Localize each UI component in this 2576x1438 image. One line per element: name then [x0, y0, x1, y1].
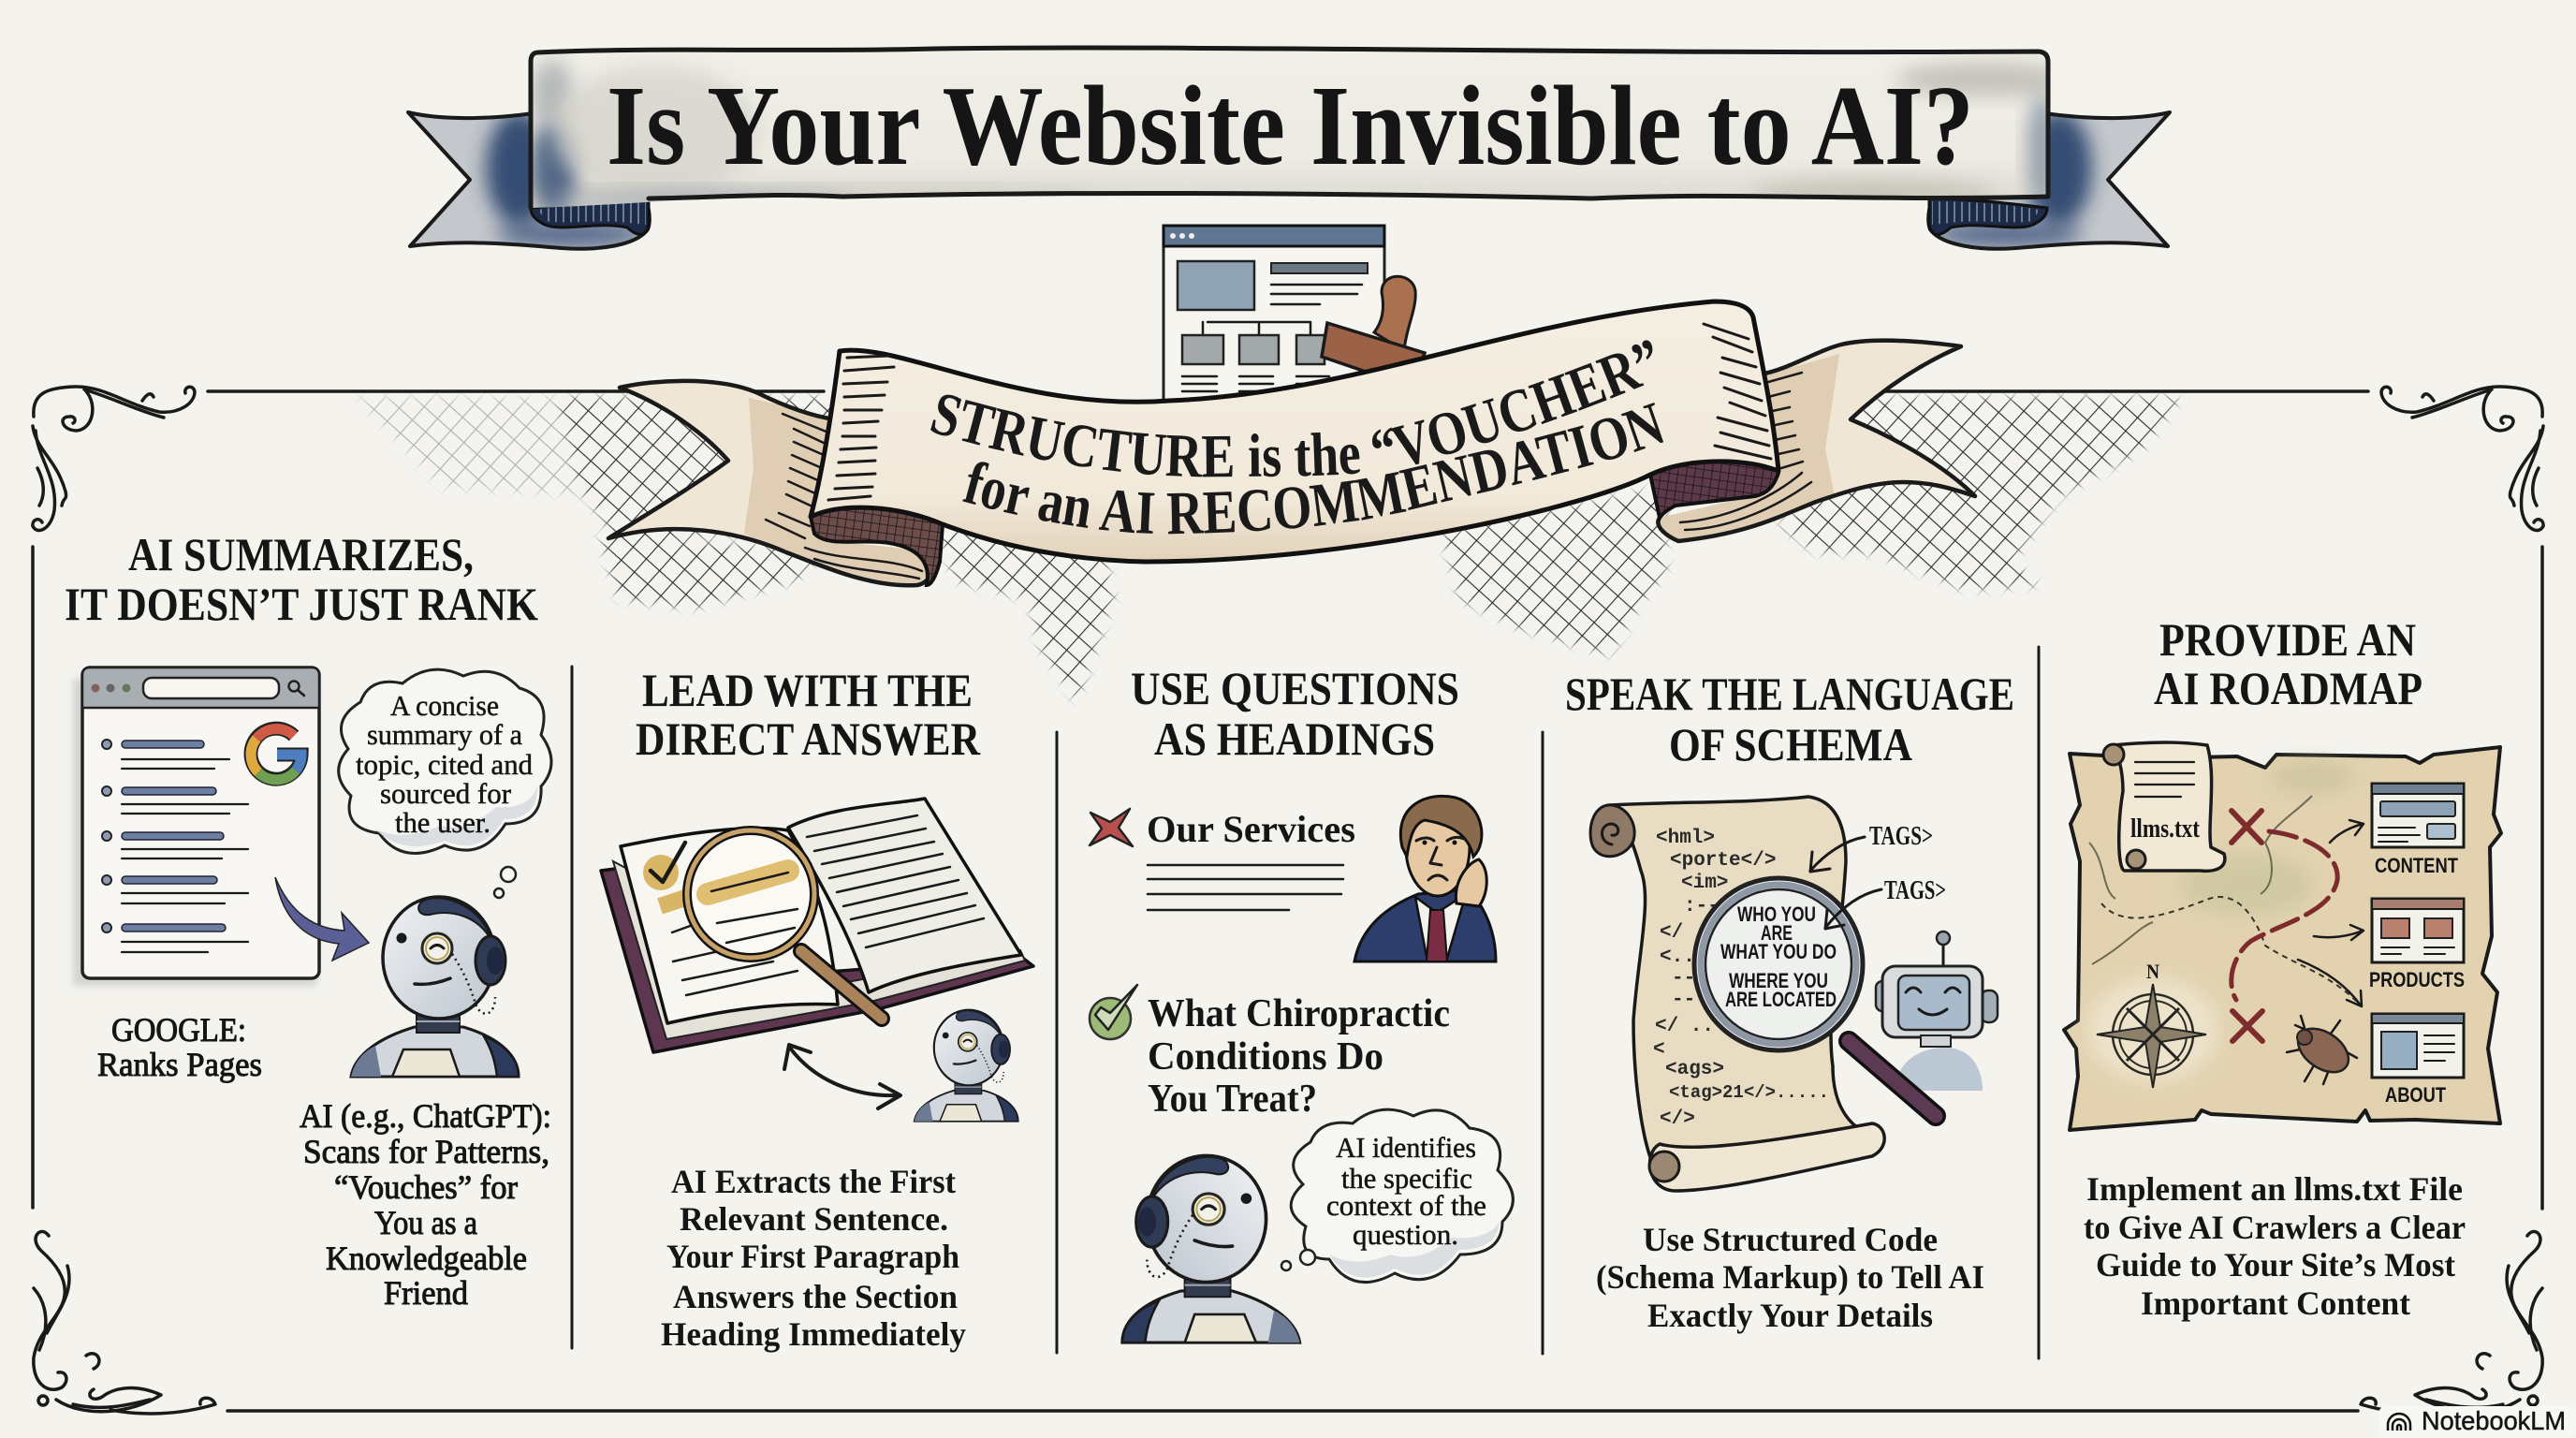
- good heading example: Conditions Do: [1148, 1035, 1383, 1078]
- NotebookLM watermark: [2378, 1406, 2576, 1438]
- ribbon text: STRUCTURE is the “VOUCHER”: [930, 340, 1653, 477]
- thought bubble: A concise: [390, 689, 499, 722]
- code lines: <..: [1660, 946, 1695, 968]
- body text: Implement an llms.txt File: [2086, 1170, 2463, 1208]
- heading: PROVIDE AN: [2159, 613, 2416, 666]
- tag labels and arrows: TAGS>: [1884, 876, 1946, 905]
- heading: [636, 664, 981, 765]
- icon: google G logo: [251, 728, 301, 780]
- caption: AI: AI (e.g., ChatGPT):: [300, 1097, 551, 1135]
- body text: (Schema Markup) to Tell AI: [1596, 1258, 1984, 1296]
- thought bubble: sourced for: [380, 777, 512, 810]
- body text: AI Extracts the First: [671, 1163, 956, 1200]
- banner left tail: [408, 110, 650, 249]
- good heading example: You Treat?: [1148, 1078, 1317, 1121]
- thought bubble: [1281, 1109, 1513, 1283]
- code lines: --: [1672, 968, 1695, 990]
- icon: llms.txt scroll: llms.txt: [2130, 814, 2201, 844]
- icon: compass rose: [2097, 960, 2206, 1088]
- icon: small robot: [915, 1010, 1018, 1122]
- code lines: <: [1653, 1039, 1665, 1061]
- icon: code scroll: [1590, 797, 1884, 1191]
- caption: google: GOOGLE:: [111, 1011, 246, 1049]
- site page: products: [2369, 899, 2465, 991]
- heading: [65, 528, 538, 630]
- banner right tail: [1928, 110, 2170, 249]
- caption: AI: Scans for Patterns,: [303, 1133, 549, 1170]
- icon: website page with stamp: [1164, 226, 1425, 404]
- icon: magnifying glass: WHAT YOU DO: [1720, 940, 1837, 963]
- code lines: :--: [1684, 896, 1720, 917]
- heading: IT DOESN’T JUST RANK: [65, 578, 538, 630]
- site page: content: [2372, 784, 2464, 877]
- body text: to Give AI Crawlers a Clear: [2084, 1209, 2466, 1246]
- icon: llms.txt scroll: [2103, 742, 2225, 871]
- site page: about: ABOUT: [2385, 1083, 2446, 1107]
- code lines: [1653, 828, 1829, 1130]
- good heading example: [1148, 992, 1450, 1121]
- caption: AI: “Vouches” for: [334, 1168, 518, 1206]
- body text: Answers the Section: [673, 1278, 958, 1315]
- thought bubble: [339, 669, 551, 898]
- NotebookLM watermark: NotebookLM: [2422, 1406, 2566, 1435]
- website page: [1164, 226, 1384, 404]
- ribbon right fold: [1650, 458, 1778, 518]
- arrow: book and robot exchange: [784, 1045, 900, 1108]
- heading: [2154, 613, 2422, 714]
- icon: green check: [1090, 985, 1137, 1039]
- body text: Your First Paragraph: [666, 1238, 959, 1275]
- icon: google browser window: [73, 668, 319, 986]
- body text: Heading Immediately: [661, 1315, 966, 1353]
- ribbon: structure is the voucher: [607, 300, 1977, 588]
- rubber stamp: [1322, 276, 1425, 388]
- title text: Is Your Website Invisible to AI?: [607, 63, 1974, 189]
- heading: SPEAK THE LANGUAGE: [1565, 668, 2014, 720]
- icon: smiling robot: [1876, 932, 1998, 1091]
- ribbon left tail: [608, 381, 931, 585]
- code lines: </: [1660, 922, 1683, 944]
- title banner: [408, 48, 2170, 249]
- heading: [1131, 662, 1459, 765]
- icon: bored man: [1354, 796, 1496, 961]
- icon: NotebookLM: [2388, 1414, 2410, 1431]
- heading: USE QUESTIONS: [1131, 662, 1459, 714]
- tag labels and arrows: [1810, 822, 1946, 929]
- body text: [1596, 1221, 1984, 1334]
- arrows to site pages: [2298, 820, 2364, 1006]
- body text: Use Structured Code: [1643, 1221, 1938, 1258]
- thought bubble: the specific: [1341, 1162, 1472, 1195]
- icon: compass rose: N: [2146, 960, 2159, 983]
- icon: beetle: [2287, 1016, 2357, 1084]
- body text: Guide to Your Site’s Most: [2096, 1246, 2455, 1284]
- icon: magnifying glass: WHO YOU: [1737, 902, 1816, 926]
- arrow: google to AI: [275, 877, 369, 961]
- code lines: <im>: [1681, 873, 1728, 894]
- bad heading example: [1147, 808, 1355, 910]
- thought bubble: AI identifies: [1336, 1131, 1476, 1164]
- code lines: <hml>: [1656, 828, 1715, 849]
- thought bubble: summary of a: [367, 718, 522, 751]
- banner main body: [531, 48, 2048, 208]
- panel: use questions as headings: [1090, 662, 1513, 1343]
- caption: AI: Knowledgeable: [326, 1240, 527, 1277]
- ribbon edge shading: [828, 324, 1771, 500]
- caption: AI: [300, 1097, 551, 1312]
- ribbon main body: [811, 301, 1778, 562]
- ribbon left fold: [811, 507, 943, 585]
- body text: [2084, 1170, 2466, 1322]
- bad heading example: Our Services: [1147, 808, 1355, 850]
- icon: red cross: [1090, 809, 1133, 846]
- icon: magnifying glass: [1694, 878, 1936, 1116]
- ornate frame: [33, 387, 2543, 1414]
- code lines: <tag>21</>.....: [1669, 1082, 1829, 1103]
- heading: AS HEADINGS: [1154, 712, 1435, 765]
- caption: AI: Friend: [384, 1274, 468, 1312]
- heading: AI SUMMARIZES,: [128, 528, 474, 580]
- icon: magnifying glass: ARE LOCATED: [1725, 988, 1837, 1011]
- heading: LEAD WITH THE: [642, 664, 973, 716]
- body text: Relevant Sentence.: [680, 1200, 948, 1238]
- crosshatch shading behind ribbon: [356, 393, 2183, 706]
- site page: products: PRODUCTS: [2369, 968, 2465, 991]
- thought bubble: question.: [1353, 1218, 1458, 1251]
- caption: google: [97, 1011, 262, 1083]
- treasure map: [2064, 747, 2501, 1130]
- body text: Important Content: [2141, 1284, 2410, 1322]
- good heading example: What Chiropractic: [1148, 992, 1450, 1035]
- icon: robot: [1122, 1155, 1300, 1343]
- thought bubble: the user.: [395, 806, 490, 839]
- body text: Exactly Your Details: [1647, 1297, 1933, 1334]
- thought bubble: topic, cited and: [356, 748, 533, 781]
- icon: magnifying glass: WHERE YOU: [1729, 969, 1828, 992]
- thought bubble: context of the: [1326, 1189, 1486, 1222]
- heading: [1565, 668, 2014, 770]
- heading: DIRECT ANSWER: [636, 712, 981, 765]
- code lines: </ ..: [1655, 1016, 1714, 1037]
- ribbon right tail: [1658, 341, 1975, 541]
- heading: OF SCHEMA: [1669, 718, 1912, 770]
- site page: content: CONTENT: [2375, 854, 2458, 877]
- code lines: <porte</>: [1670, 850, 1776, 872]
- site page: about: [2372, 1014, 2464, 1107]
- panel: AI summarizes: [65, 528, 551, 1312]
- icon: magnifying glass: ARE: [1761, 921, 1793, 945]
- ribbon: structure is the voucher: for an AI RECOMMENDATION: [962, 403, 1664, 534]
- caption: google: Ranks Pages: [97, 1046, 262, 1083]
- icon: robot with monocle: [351, 897, 519, 1077]
- panel: lead with the direct answer: [601, 664, 1033, 1353]
- panel: speak the language of schema: [1565, 668, 2014, 1334]
- caption: AI: You as a: [374, 1204, 477, 1241]
- icon: open book with magnifier: [601, 799, 1033, 1052]
- body text: [661, 1163, 966, 1353]
- code lines: --: [1672, 990, 1695, 1011]
- red route with X marks: [2232, 811, 2337, 1041]
- tag labels and arrows: TAGS>: [1869, 822, 1933, 851]
- heading: AI ROADMAP: [2154, 662, 2422, 714]
- panel: provide an AI roadmap: [2064, 613, 2501, 1322]
- code lines: </>: [1660, 1108, 1695, 1130]
- code lines: <ags>: [1665, 1059, 1724, 1080]
